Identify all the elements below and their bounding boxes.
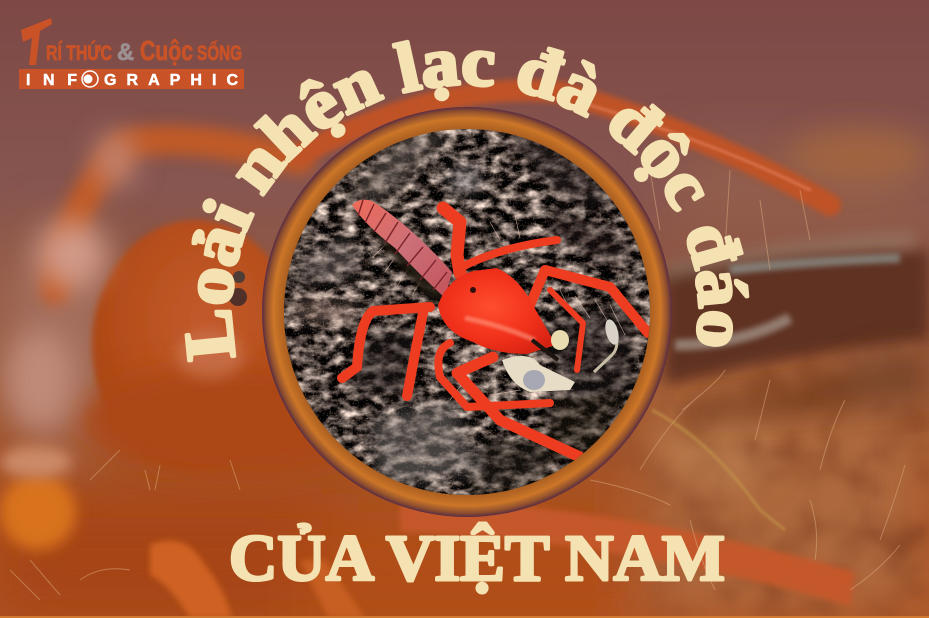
blurred legs: [0, 90, 855, 618]
logo: Tri Thuc & Cuoc Song Infographic: [19, 18, 244, 89]
subtitle: CỦA VIỆT NAM: [229, 522, 725, 595]
rear body of large spider: [665, 240, 929, 420]
soil texture: [638, 359, 929, 616]
circular photo: red camel spider on bark: [284, 129, 650, 495]
spider abdomen: [352, 200, 452, 300]
logo wordmark: RÍ THỨC: [46, 41, 112, 65]
logo wordmark: &: [117, 39, 134, 66]
bark patches: [290, 130, 640, 490]
logo wordmark: SỐNG: [197, 41, 242, 65]
eyes: [229, 271, 247, 306]
logo: Tri Thuc & Cuoc Song Infographic: GRAPHIC: [104, 72, 238, 89]
prey: [502, 318, 621, 392]
big orange head: [92, 220, 298, 470]
logo icon: T mark: [21, 18, 52, 65]
logo infographic bar: [19, 69, 244, 89]
spider legs: [342, 208, 648, 457]
fangs: [532, 340, 558, 360]
circular photo frame: [262, 107, 672, 517]
spider hairs: [372, 215, 625, 400]
hairs: [10, 170, 905, 600]
spider carapace: [438, 268, 556, 354]
logo wordmark: Cuộc: [140, 35, 193, 66]
logo: Tri Thuc & Cuoc Song Infographic: INF: [26, 72, 77, 89]
arched title: Loải nhện lạc đà độc đáo: [184, 40, 750, 362]
